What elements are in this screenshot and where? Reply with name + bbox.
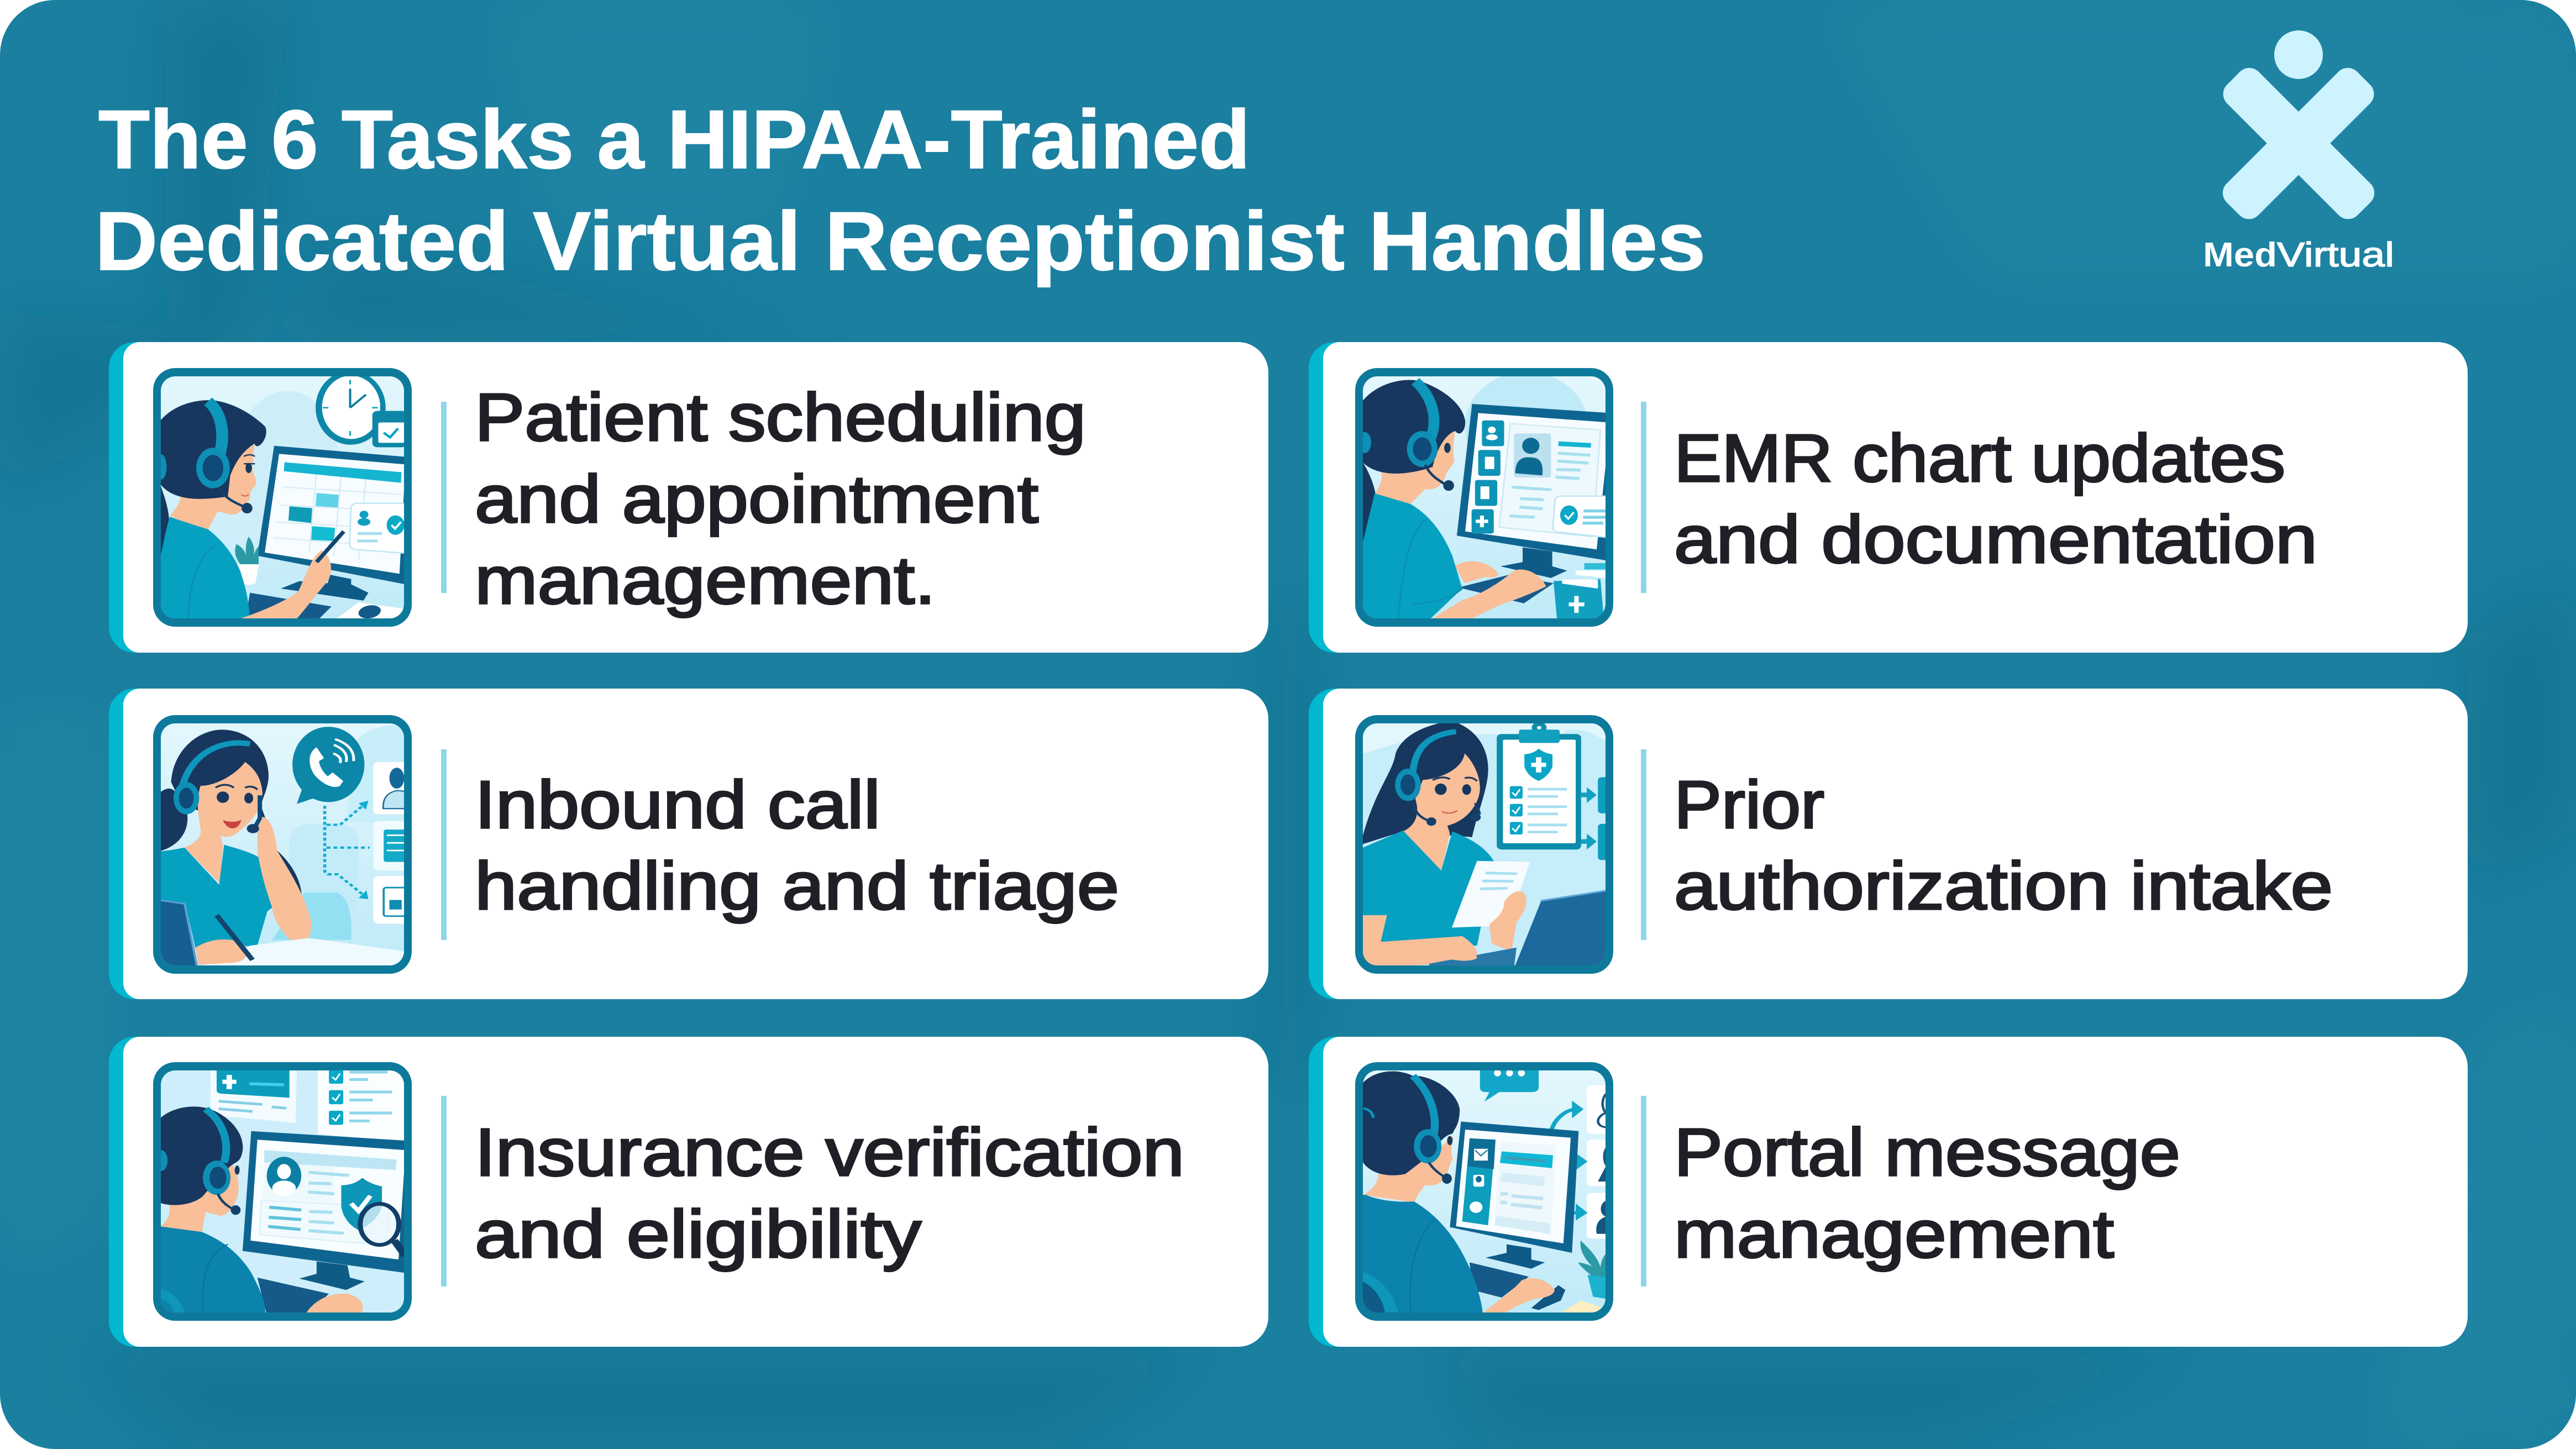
text: prior authorization: Prior — [1674, 767, 1824, 842]
text: patient scheduling: management. — [475, 543, 936, 618]
panel: portal message management — [1309, 1037, 2468, 1347]
icon: receptionist taking call — [153, 715, 412, 974]
text: inbound call: Inbound call — [475, 767, 880, 842]
panel: patient scheduling — [109, 342, 1268, 653]
panel: EMR chart updates — [1309, 342, 2468, 653]
icon: receptionist with patient chart — [1355, 368, 1613, 627]
text: EMR chart updates — [1674, 421, 2317, 577]
icon: receptionist with calendar and clock — [153, 368, 412, 627]
text: patient scheduling: and appointment — [475, 461, 1038, 537]
text: portal message — [1674, 1115, 2180, 1272]
title — [95, 93, 1706, 287]
text: patient scheduling — [475, 380, 1086, 618]
text: inbound call: handling and triage — [475, 848, 1119, 923]
title: Dedicated Virtual Receptionist Handles — [95, 195, 1706, 287]
logo: MedVirtual: Med — [2203, 236, 2277, 274]
text: insurance verification: Insurance verification — [475, 1115, 1184, 1190]
title: The 6 Tasks a HIPAA-Trained — [98, 93, 1250, 186]
panel: inbound call handling — [109, 689, 1268, 999]
text: inbound call — [475, 767, 1119, 923]
text: prior authorization: authorization intake — [1674, 848, 2333, 923]
text: portal message: Portal message — [1674, 1115, 2180, 1190]
icon: receptionist verifying insurance — [153, 1062, 412, 1321]
text: insurance verification: and eligibility — [475, 1196, 921, 1272]
text: patient scheduling: Patient scheduling — [475, 380, 1086, 455]
icon: receptionist with clipboard — [1355, 715, 1613, 974]
text: insurance verification — [475, 1115, 1184, 1272]
panel: prior authorization — [1309, 689, 2468, 999]
logo: MedVirtual — [2203, 30, 2394, 274]
logo: MedVirtual: Virtual — [2277, 236, 2394, 274]
text: EMR chart updates: EMR chart updates — [1674, 421, 2285, 496]
text: portal message: management — [1674, 1196, 2114, 1272]
icon: receptionist managing portal messages — [1355, 1062, 1614, 1321]
panel: insurance verification — [109, 1037, 1268, 1347]
text: EMR chart updates: and documentation — [1674, 502, 2317, 577]
text: prior authorization — [1674, 767, 2333, 923]
